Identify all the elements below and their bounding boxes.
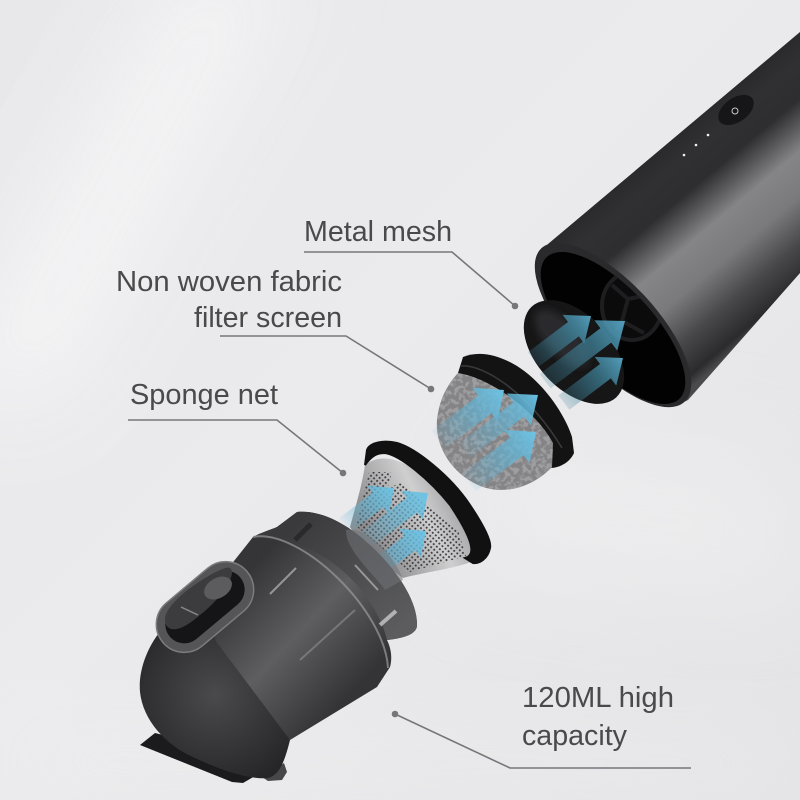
- vacuum main body: [534, 32, 800, 408]
- sponge net cone: [334, 442, 490, 591]
- arrows on fabric: [426, 373, 550, 499]
- solid dome: [140, 600, 290, 778]
- power button: [713, 89, 759, 131]
- body shell: [543, 32, 800, 403]
- label: metal mesh: Metal mesh: [304, 216, 452, 248]
- arrows on metal mesh: [523, 302, 636, 417]
- label: non woven fabric filter screen: [116, 266, 434, 392]
- label: non woven fabric filter screen: Non woven fabric: [116, 266, 342, 298]
- perforated mesh: [356, 472, 466, 572]
- dust container: [140, 512, 417, 783]
- label: capacity: 120ML high: [522, 682, 674, 714]
- grey sponge sphere: [437, 373, 553, 490]
- base tab: [140, 733, 262, 783]
- arrows on cone: [334, 474, 439, 591]
- filter rim: [458, 354, 574, 468]
- open mouth rim: [510, 219, 716, 431]
- cone body: [350, 458, 477, 578]
- canister highlights: [270, 524, 396, 660]
- dust door: [145, 550, 265, 664]
- label: sponge net: Sponge net: [130, 379, 278, 411]
- label: metal mesh: [304, 216, 518, 308]
- label: capacity: capacity: [522, 720, 628, 752]
- transparent canister: [215, 512, 417, 740]
- connector collar: [346, 529, 403, 590]
- leader line: [220, 336, 434, 392]
- cone rim: [365, 442, 490, 563]
- metal mesh disc: [505, 281, 643, 423]
- open mouth interior: [518, 230, 708, 426]
- non woven fabric filter: [426, 354, 574, 499]
- battery indicator lights: [683, 134, 709, 156]
- leader line: [304, 252, 518, 308]
- canister top section: [253, 512, 417, 640]
- label: sponge net: [128, 379, 346, 476]
- leader line: [392, 712, 691, 768]
- rear clip: [262, 763, 287, 781]
- motor grille: [602, 272, 662, 340]
- leader line: [128, 420, 346, 476]
- canister ridge: [253, 536, 388, 668]
- label: non woven fabric filter screen: filter screen: [194, 302, 342, 334]
- label: capacity: [392, 682, 691, 768]
